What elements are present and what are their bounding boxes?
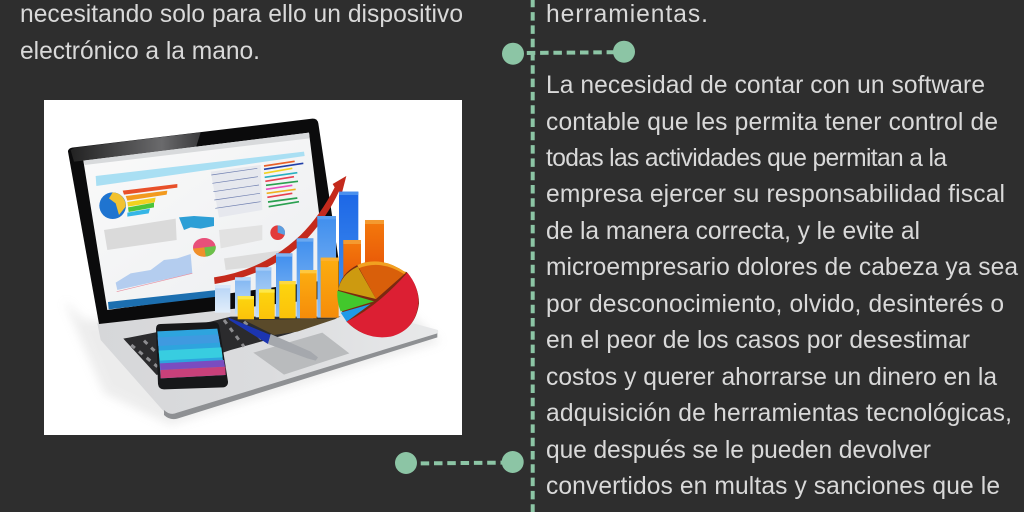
- right text block: convertidos en multas y sanciones que le: [546, 473, 1000, 500]
- right text block: que después se le pueden devolver: [546, 437, 931, 464]
- left text block: necesitando solo para ello un dispositivo: [20, 1, 463, 28]
- illustration: laptop with charts: [44, 100, 462, 435]
- laptop screen frame: [68, 119, 341, 324]
- keyboard: [123, 317, 341, 375]
- right text block: adquisición de herramientas tecnológicas,: [546, 400, 1012, 427]
- screen colour list: [264, 161, 303, 207]
- orange bars back: [343, 220, 384, 280]
- screen globe: [99, 192, 126, 219]
- screen bars: [123, 184, 177, 195]
- left text block: [20, 1, 463, 65]
- right text: herramientas: herramientas.: [546, 1, 708, 28]
- upper connector: [502, 41, 635, 65]
- right text block: en el peor de los casos por desestimar: [546, 327, 970, 354]
- soft shadow: [64, 300, 441, 425]
- screen pie: [193, 238, 216, 257]
- blue bars: [215, 192, 358, 318]
- red arrow: [214, 176, 346, 284]
- laptop base: [97, 297, 438, 414]
- right text block: de la manera correcta, y le evite al: [546, 218, 920, 245]
- screen: [83, 133, 327, 310]
- screen map: [179, 216, 214, 230]
- smartphone: [156, 322, 228, 389]
- right text block: empresa ejercer su responsabilidad fiscal: [546, 181, 1005, 208]
- trackpad: [253, 333, 349, 375]
- right text block: microempresario dolores de cabeza ya sea: [546, 254, 1018, 281]
- left text block: electrónico a la mano.: [20, 38, 260, 65]
- pen: [228, 317, 318, 361]
- dashed vertical timeline: [531, 0, 535, 512]
- right text block: costos y querer ahorrarse un dinero en la: [546, 364, 997, 391]
- right text block: contable que les permita tener control de: [546, 109, 998, 136]
- right text block: por desconocimiento, olvido, desinterés o: [546, 291, 1004, 318]
- screen text blocks: [104, 219, 177, 250]
- 3D pie chart: [337, 261, 419, 337]
- screen line chart: [116, 254, 192, 290]
- right text block: La necesidad de contar con un software: [546, 72, 985, 99]
- yellow and orange bars: [238, 258, 339, 319]
- lower connector: [395, 451, 524, 474]
- right text block: [546, 72, 1018, 500]
- right text block: todas las actividades que permitan a la: [546, 145, 947, 172]
- screen table: [211, 165, 262, 217]
